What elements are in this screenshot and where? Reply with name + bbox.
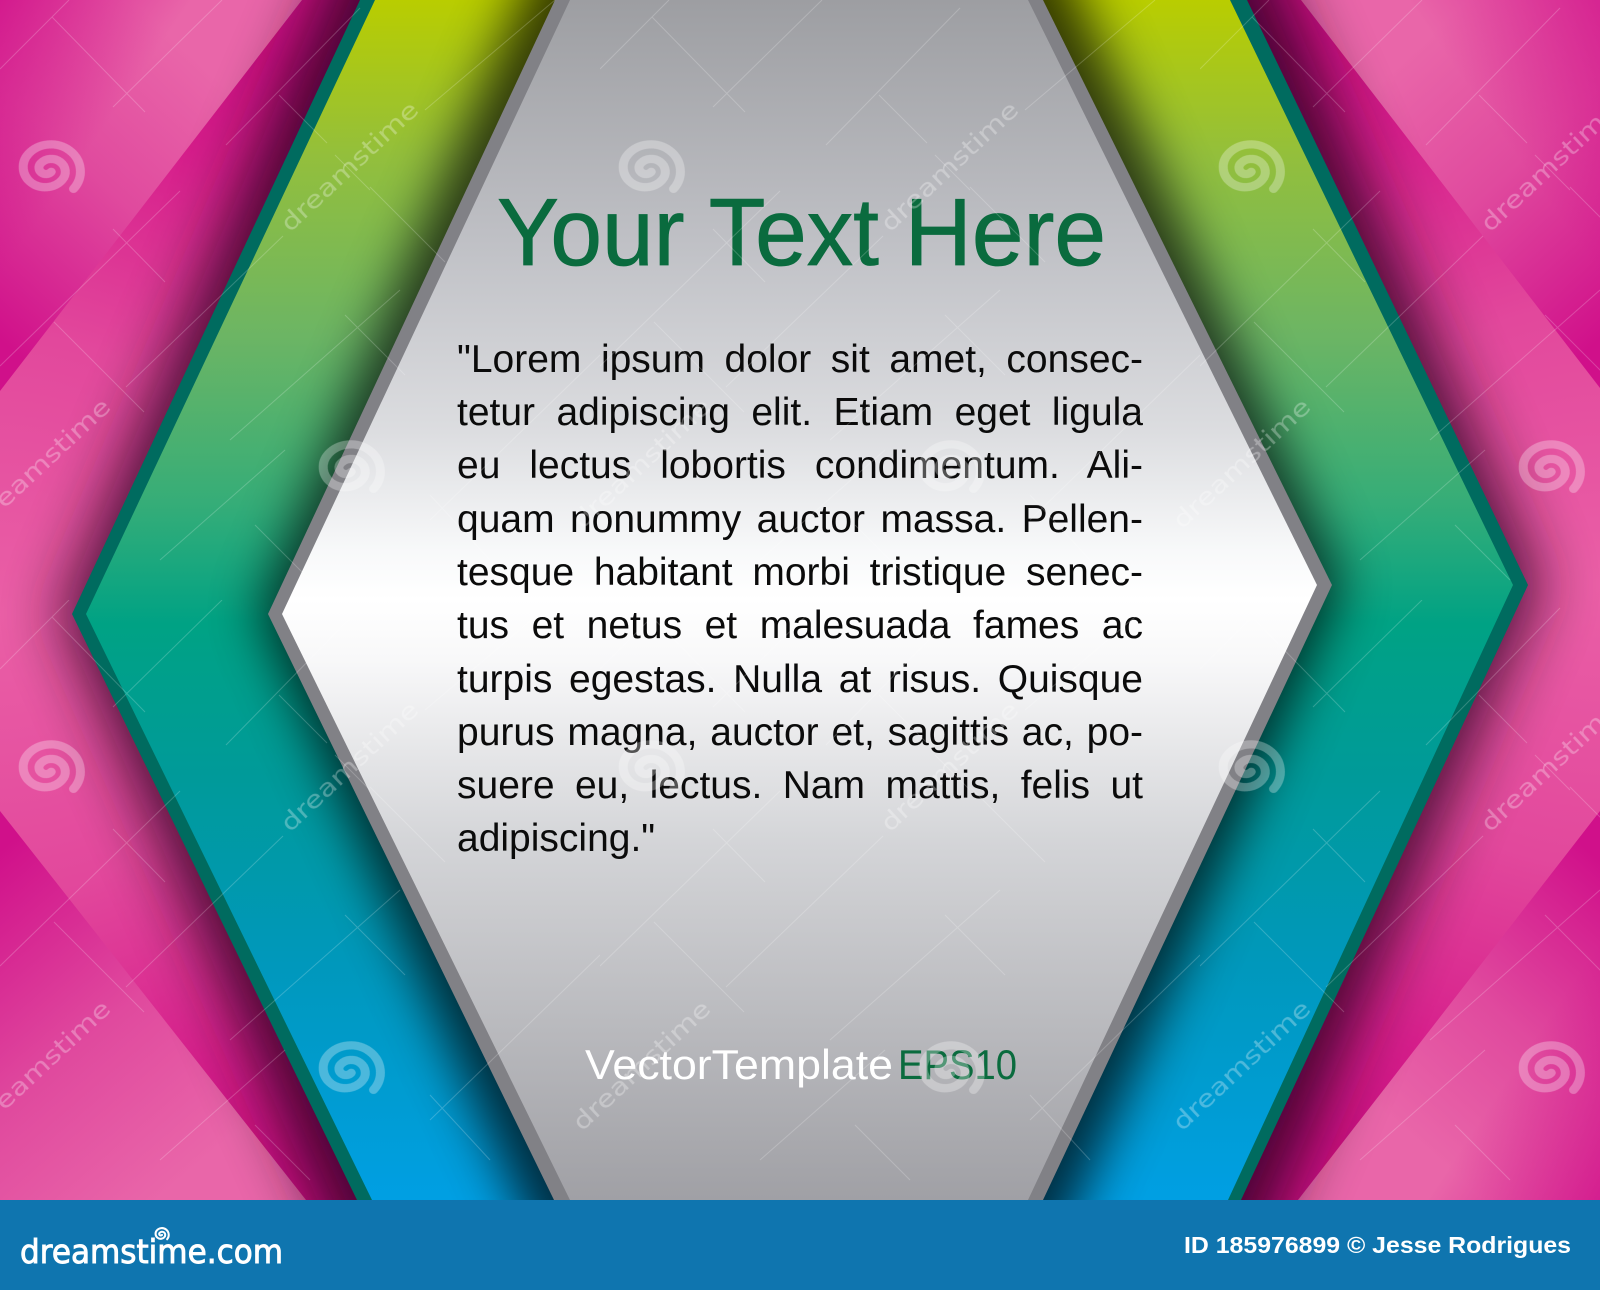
caption: EPS10: EPS10: [898, 1041, 1017, 1088]
shadow of the silver hexagon: [268, 0, 1332, 1260]
body text: tus et netus et malesuada fames ac: [457, 604, 1143, 647]
body text: suere eu, lectus. Nam mattis, felis ut: [457, 764, 1143, 807]
watermark: rotated dreamstime text: dreamstime: [1167, 393, 1316, 534]
watermark: rotated dreamstime text: dreamstime: [1475, 96, 1600, 237]
watermark: rotated dreamstime text: dreamstime: [875, 696, 1024, 837]
watermark: rotated dreamstime text: dreamstime: [275, 696, 424, 837]
panel: top-right pink corner: [1301, 0, 1600, 388]
caption: vector template: VectorTemplate: [585, 1041, 893, 1088]
panel: grey hexagon border: [268, 0, 1332, 1200]
watermark: rotated dreamstime text: dreamstime: [1475, 696, 1600, 837]
icon: footer logo spiral: [153, 1225, 171, 1243]
panel: top-left pink corner: [0, 0, 302, 391]
body text: purus magna, auctor et, sagittis ac, po-: [457, 711, 1143, 754]
watermark: rotated dreamstime text: dreamstime: [275, 96, 424, 237]
body text: eu lectus lobortis condimentum. Ali-: [457, 444, 1143, 487]
body text: tesque habitant morbi tristique senec-: [457, 551, 1143, 594]
body text: tetur adipiscing elit. Etiam eget ligula: [457, 391, 1143, 434]
panel: bottom-left pink corner: [0, 811, 306, 1200]
panel: bottom-right pink corner: [1298, 811, 1600, 1200]
watermark: rotated dreamstime text: dreamstime: [1167, 995, 1316, 1136]
watermark: spirals: [14, 133, 1592, 1105]
panel: silver hexagon: [282, 0, 1317, 1200]
watermark: rotated dreamstime text: dreamstime: [875, 96, 1024, 237]
body text: quam nonummy auctor massa. Pellen-: [457, 498, 1143, 541]
footer logo: dreamstime.com: dreamstime.com: [20, 1232, 283, 1271]
body text: [457, 338, 1143, 860]
footer credit: ID 185976899 © Jesse Rodrigues: [1184, 1232, 1571, 1258]
body text: "Lorem ipsum dolor sit amet, consec-: [457, 338, 1143, 381]
watermark: rotated dreamstime text: dreamstime: [567, 995, 716, 1136]
title: Your Text Here: [497, 179, 1106, 286]
footer bar: [0, 1200, 1600, 1290]
body text: adipiscing.": [457, 817, 655, 860]
watermark: rotated dreamstime text: dreamstime: [567, 393, 716, 534]
body text: turpis egestas. Nulla at risus. Quisque: [457, 658, 1143, 701]
